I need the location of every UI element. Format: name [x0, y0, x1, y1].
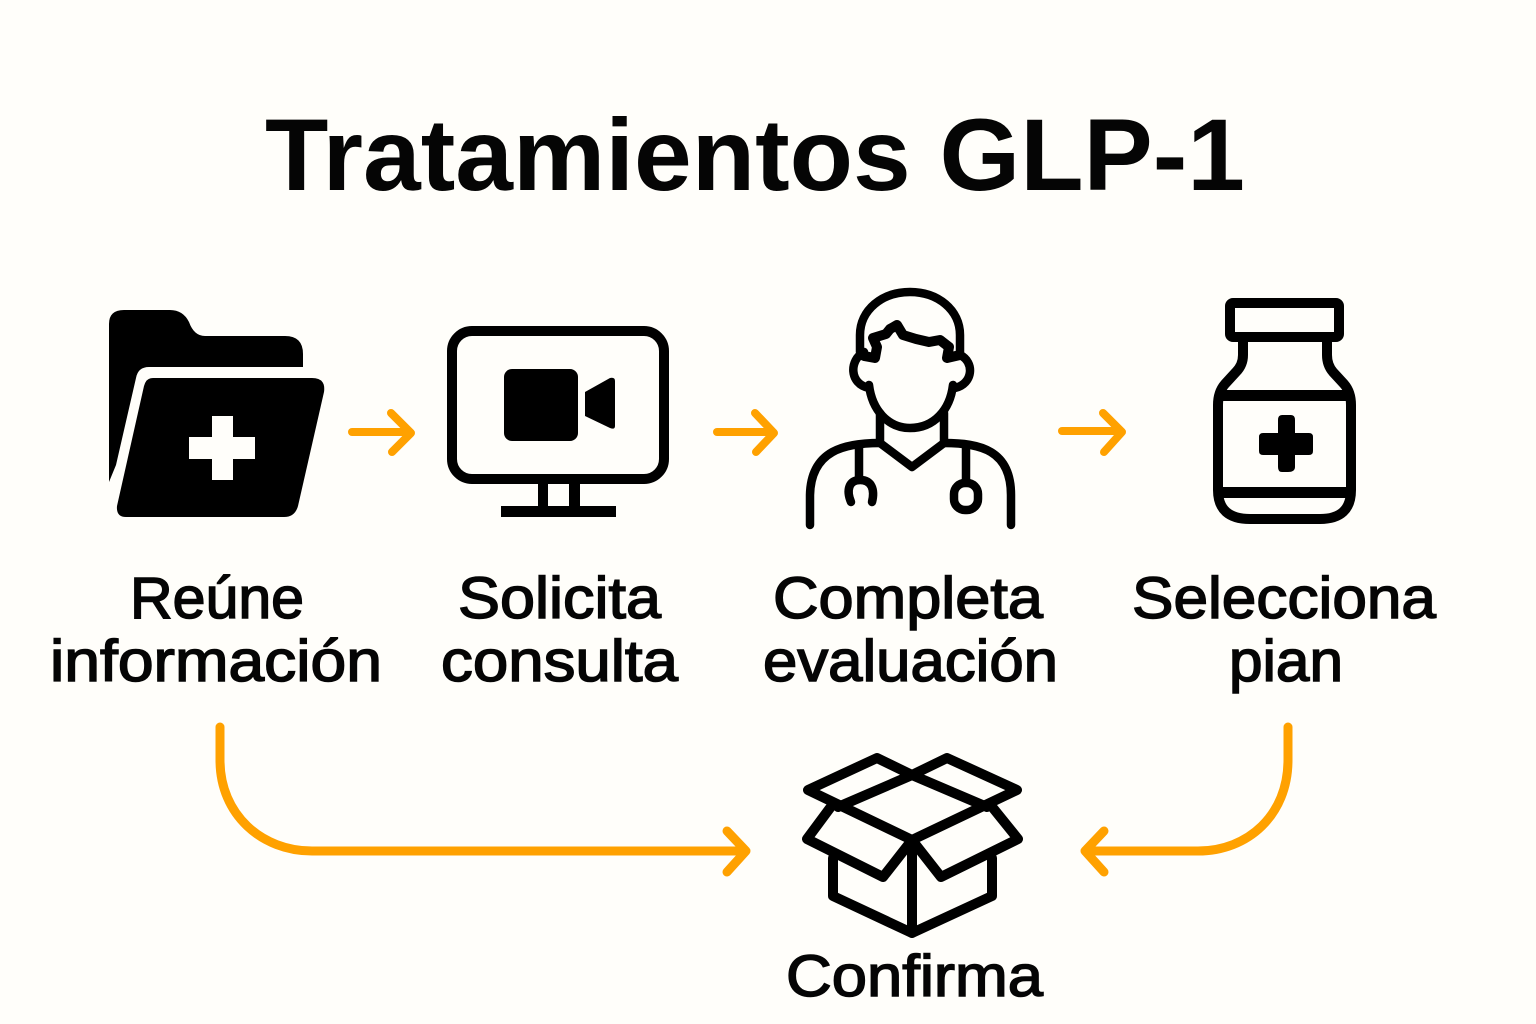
label: Reúne información: información — [50, 629, 382, 694]
label: Reúne información — [50, 566, 382, 694]
icon: medical folder — [109, 310, 324, 517]
icon: video consultation monitor — [452, 331, 664, 517]
arrow: step 2 to step 3 — [717, 413, 774, 452]
arrow: right path to confirmation — [1085, 727, 1288, 872]
label: Selecciona pian: pian — [1229, 629, 1343, 694]
label: Completa evaluación: evaluación — [763, 629, 1058, 694]
icon: doctor with stethoscope — [810, 292, 1011, 525]
label: Selecciona pian: Selecciona — [1132, 566, 1437, 631]
icon: open box — [807, 758, 1018, 933]
label: Confirma: Confirma — [786, 944, 1044, 1009]
label: Solicita consulta: Solicita — [458, 566, 662, 631]
label: Solicita consulta: consulta — [441, 629, 679, 694]
label: Selecciona pian — [1132, 566, 1437, 694]
arrow: step 3 to step 4 — [1062, 413, 1122, 452]
icon: medicine bottle — [1218, 303, 1351, 519]
label: Solicita consulta — [441, 566, 679, 694]
title: Tratamientos GLP-1 — [265, 98, 1245, 212]
arrow: step 1 to step 2 — [352, 413, 411, 452]
arrow: left path to confirmation — [220, 727, 746, 872]
label: Completa evaluación: Completa — [773, 566, 1044, 631]
label: Reúne información: Reúne — [130, 566, 304, 631]
label: Completa evaluación — [763, 566, 1058, 694]
